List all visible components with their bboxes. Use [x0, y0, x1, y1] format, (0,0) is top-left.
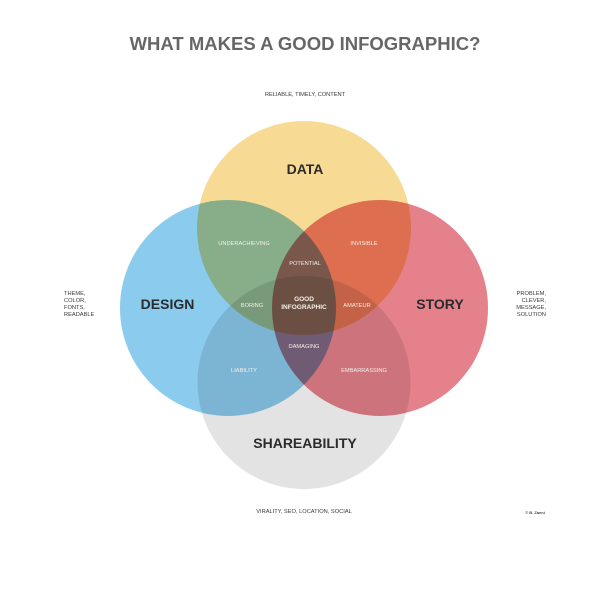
caption: shareability attributes: VIRALITY, SEO, LOCATION, SOCIAL	[256, 509, 352, 515]
circle: shareability	[198, 276, 410, 489]
label: data: DATA	[287, 161, 323, 177]
overlap: boring: BORING	[241, 303, 263, 309]
caption: design attributes: THEME,	[64, 291, 86, 297]
caption: design attributes	[64, 291, 95, 318]
overlap: potential: POTENTIAL	[289, 261, 321, 267]
caption: story attributes: PROBLEM,	[517, 291, 546, 297]
overlap: liability: LIABILITY	[231, 368, 257, 374]
circle: design	[120, 200, 336, 416]
label: shareability: SHAREABILITY	[253, 435, 357, 451]
circle: story	[272, 200, 488, 416]
overlap: amateur: AMATEUR	[343, 303, 371, 309]
overlap: embarrassing: EMBARRASSING	[341, 368, 387, 374]
overlap: good infographic	[281, 296, 327, 311]
overlap: good infographic: INFOGRAPHIC	[281, 304, 327, 311]
overlap: invisible: INVISIBLE	[350, 241, 378, 247]
caption: story attributes: MESSAGE,	[516, 305, 546, 311]
overlap: good infographic: GOOD	[294, 296, 314, 303]
credit: © B. Zaeni	[525, 510, 545, 515]
label: story: STORY	[416, 296, 464, 312]
label: design: DESIGN	[141, 296, 194, 312]
caption: data attributes: RELIABLE, TIMELY, CONTENT	[265, 92, 346, 98]
title: WHAT MAKES A GOOD INFOGRAPHIC?	[130, 33, 480, 54]
caption: story attributes: CLEVER,	[522, 298, 546, 304]
caption: design attributes: FONTS,	[64, 305, 85, 311]
caption: story attributes	[516, 291, 546, 318]
caption: design attributes: READABLE	[64, 312, 95, 318]
caption: design attributes: COLOR,	[64, 298, 86, 304]
caption: story attributes: SOLUTION	[517, 312, 546, 318]
circle: data	[197, 121, 411, 335]
overlap: damaging: DAMAGING	[289, 344, 319, 350]
venn diagram	[120, 121, 488, 489]
overlap: underachieving: UNDERACHIEVING	[218, 241, 270, 247]
